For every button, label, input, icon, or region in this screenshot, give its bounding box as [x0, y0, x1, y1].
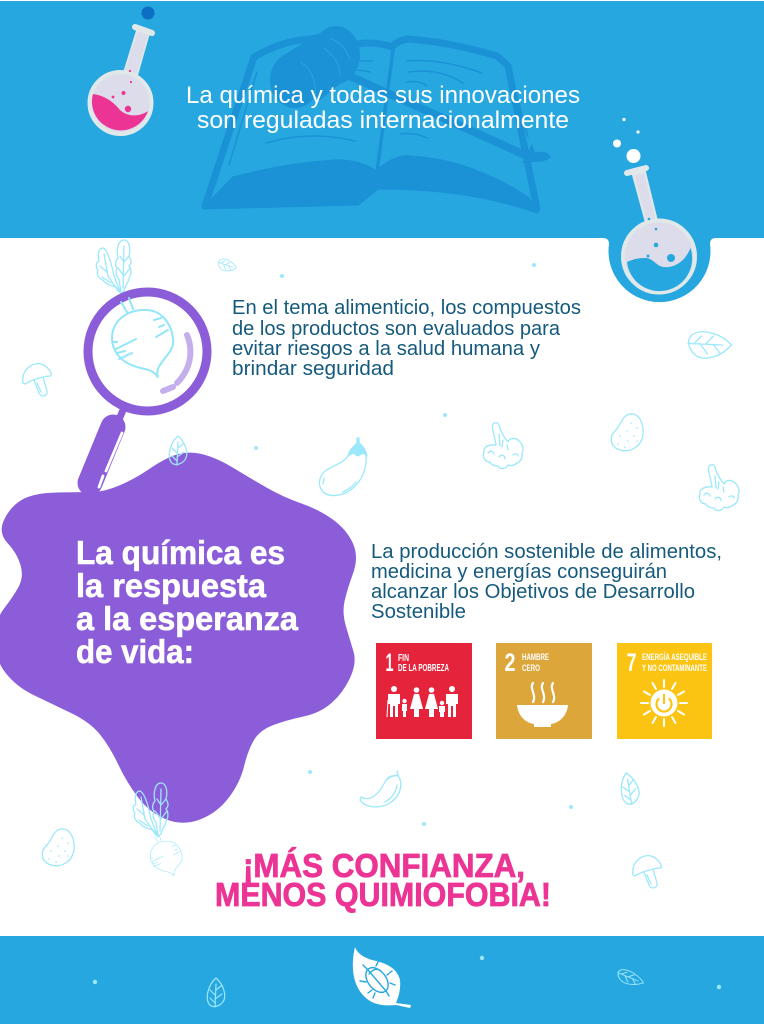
SDG 2 card: 2 — [504, 649, 516, 677]
slogan: ¡MÁS CONFIANZA, — [243, 847, 525, 884]
SDG 7 card: ENERGÍA ASEQUIBLE — [642, 652, 707, 663]
paragraph: sustainable development: medicina y energías conseguirán — [371, 560, 667, 583]
heading in blob: a la esperanza — [76, 600, 299, 637]
paragraph: food safety: de los productos son evaluados para — [232, 317, 561, 340]
decorative dots — [254, 263, 573, 826]
band decorations — [93, 956, 721, 1007]
paragraph: sustainable development: La producción sostenible de alimentos, — [371, 540, 722, 563]
slogan — [215, 847, 551, 913]
SDG 7 card: 7 — [626, 649, 636, 677]
title — [186, 82, 580, 134]
SDG 2 card: HAMBRE — [522, 652, 549, 663]
icon: blue flask — [613, 118, 695, 293]
heading in blob: de vida: — [76, 633, 194, 670]
SDG 2 card — [496, 643, 592, 739]
top banner with flask notch — [0, 1, 764, 302]
paragraph: sustainable development: Sostenible — [371, 600, 466, 623]
SDG 7 card — [617, 643, 712, 739]
icon: pink flask — [90, 6, 154, 134]
heading in blob — [76, 534, 299, 670]
title: La química y todas sus innovaciones — [186, 82, 580, 109]
paragraph: food safety: brindar seguridad — [232, 357, 394, 380]
SDG 1 card — [376, 643, 472, 739]
paragraph: sustainable development: alcanzar los Objetivos de Desarrollo — [371, 580, 695, 603]
SDG 7 card: Y NO CONTAMINANTE — [642, 663, 707, 674]
heading in blob: La química es — [76, 534, 285, 571]
background doodles — [23, 240, 739, 888]
slogan: MENOS QUIMIOFOBIA! — [215, 876, 551, 913]
title: son reguladas internacionalmente — [197, 107, 569, 134]
paragraph: sustainable development — [371, 540, 722, 623]
magnifying glass with turnip — [88, 292, 207, 487]
heading in blob: la respuesta — [76, 567, 267, 604]
SDG 1 card: DE LA POBREZA — [398, 663, 449, 674]
paragraph: food safety — [232, 296, 581, 380]
paragraph: food safety: En el tema alimenticio, los compuestos — [232, 296, 581, 319]
bottom band — [0, 936, 764, 1024]
paragraph: food safety: evitar riesgos a la salud humana y — [232, 337, 541, 360]
icon: book and gavel — [204, 26, 551, 212]
SDG 2 card: CERO — [522, 663, 540, 674]
icon: leaf with bug — [353, 947, 411, 1008]
SDG 1 card: FIN — [398, 653, 409, 664]
purple blob — [0, 453, 356, 823]
SDG 1 card: 1 — [386, 649, 394, 677]
